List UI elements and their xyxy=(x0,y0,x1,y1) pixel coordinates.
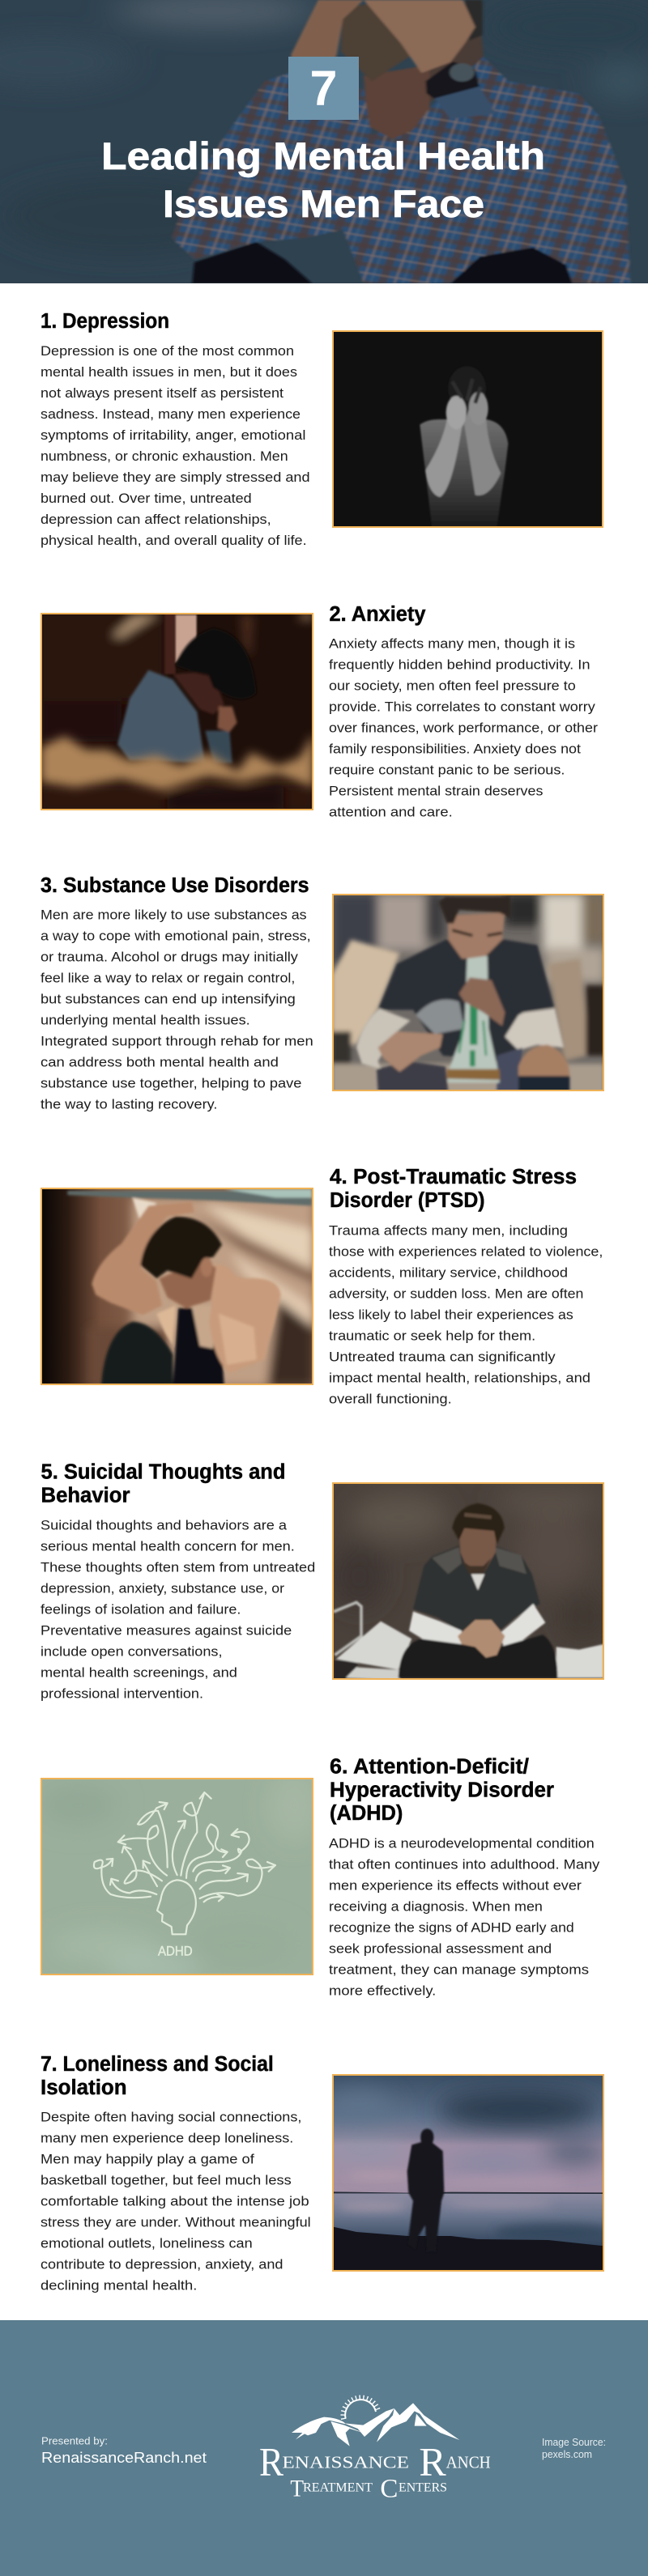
heading: adhd xyxy=(330,1755,554,1825)
text block: depression: burned out. Over time, untreated xyxy=(40,491,252,506)
heading: ptsd xyxy=(330,1166,577,1212)
text block: loneliness: stress they are under. Without meaningful xyxy=(40,2215,311,2230)
heading: suicidal thoughts xyxy=(40,1460,285,1507)
text block: depression: mental health issues in men, but it does xyxy=(40,364,297,380)
logo wordmark xyxy=(259,2439,491,2503)
text block: adhd: that often continues into adulthood. Many xyxy=(329,1857,600,1872)
photo: man in blue shirt behind blurred foreground xyxy=(40,613,313,810)
heading: loneliness: 7. Loneliness and Social xyxy=(40,2053,274,2076)
text block: loneliness: Despite often having social connections, xyxy=(40,2110,301,2124)
panel: anxiety xyxy=(40,603,598,819)
hero banner xyxy=(0,0,648,283)
text block: depression: numbness, or chronic exhaustion. Men xyxy=(40,448,288,464)
text block: adhd: ADHD is a neurodevelopmental condition xyxy=(329,1836,595,1851)
presented by: Presented by: xyxy=(41,2435,108,2446)
text block: anxiety: our society, men often feel pressure to xyxy=(329,678,576,693)
heading: loneliness xyxy=(40,2053,274,2099)
text block: adhd: treatment, they can manage symptoms xyxy=(329,1962,589,1977)
text block: suicidal thoughts: These thoughts often stem from untreated xyxy=(40,1559,315,1575)
photo: chalk drawing of a head with arrows: ADHD xyxy=(158,1944,193,1959)
text block: anxiety: over finances, work performance, or other xyxy=(329,721,598,735)
logo wordmark: R xyxy=(259,2439,284,2485)
text block: loneliness: contribute to depression, anxiety, and xyxy=(40,2257,284,2272)
text block: depression: Depression is one of the most common xyxy=(40,343,294,359)
heading: loneliness: Isolation xyxy=(40,2077,127,2099)
text block: adhd xyxy=(329,1836,600,1998)
image source: Image Source: xyxy=(542,2437,606,2448)
text block: ptsd: impact mental health, relationships, and xyxy=(329,1370,590,1386)
text block: loneliness: many men experience deep loneliness. xyxy=(40,2131,293,2145)
text block: anxiety: Persistent mental strain deserves xyxy=(329,784,543,798)
text block: ptsd: accidents, military service, childhood xyxy=(329,1265,568,1281)
text block: substance use disorders xyxy=(40,907,313,1112)
text block: substance use disorders: Men are more likely to use substances as xyxy=(40,907,307,923)
text block: depression: depression can affect relationships, xyxy=(40,512,271,527)
hero photo: man holding his head xyxy=(0,0,648,283)
heading: suicidal thoughts: Behavior xyxy=(40,1485,130,1507)
text block: depression xyxy=(40,343,310,548)
photo: man sitting on a bed xyxy=(332,1482,604,1680)
photo: man curled with arms over head xyxy=(40,1188,313,1385)
title: Issues Men Face xyxy=(163,182,484,225)
text block: anxiety: provide. This correlates to constant worry xyxy=(329,699,595,714)
text block: adhd: recognize the signs of ADHD early and xyxy=(329,1920,574,1935)
text block: depression: sadness. Instead, many men experience xyxy=(40,406,301,422)
heading: adhd: 6. Attention-Deficit/ xyxy=(330,1755,529,1778)
text block: depression: not always present itself as persistent xyxy=(40,385,284,401)
logo wordmark: R xyxy=(419,2439,446,2485)
heading: substance use disorders: 3. Substance Use Disorders xyxy=(40,874,309,897)
text block: suicidal thoughts xyxy=(40,1517,315,1702)
text block: anxiety: require constant panic to be serious. xyxy=(329,763,565,777)
text block: ptsd xyxy=(329,1222,603,1407)
title: Leading Mental Health xyxy=(101,134,545,177)
text block: loneliness: emotional outlets, loneliness can xyxy=(40,2236,253,2251)
photo: man covering his face xyxy=(332,330,603,528)
text block: substance use disorders: but substances can end up intensifying xyxy=(40,991,296,1007)
text block: anxiety: family responsibilities. Anxiety does not xyxy=(329,742,581,756)
logo: Renaissance Ranch Treatment Centers xyxy=(259,2395,491,2503)
text block: ptsd: adversity, or sudden loss. Men are often xyxy=(329,1286,583,1302)
image source: pexels.com xyxy=(542,2449,592,2460)
heading: ptsd: 4. Post-Traumatic Stress xyxy=(330,1166,577,1188)
text block: substance use disorders: a way to cope with emotional pain, stress, xyxy=(40,928,311,944)
panel: loneliness xyxy=(40,2053,613,2293)
text block: suicidal thoughts: serious mental health concern for men. xyxy=(40,1538,295,1554)
presented by: RenaissanceRanch.net xyxy=(41,2449,207,2466)
text block: loneliness: declining mental health. xyxy=(40,2278,197,2293)
text block: substance use disorders: substance use together, helping to pave xyxy=(40,1075,301,1091)
text block: ptsd: Untreated trauma can significantly xyxy=(329,1349,556,1365)
text block: adhd: receiving a diagnosis. When men xyxy=(329,1899,543,1914)
text block: ptsd: less likely to label their experiences as xyxy=(329,1307,573,1323)
title xyxy=(101,134,545,225)
text block: anxiety: frequently hidden behind productivity. In xyxy=(329,657,590,672)
heading: adhd: Hyperactivity Disorder xyxy=(330,1779,554,1802)
text block: adhd: men experience its effects without ever xyxy=(329,1878,582,1893)
heading: ptsd: Disorder (PTSD) xyxy=(330,1189,484,1212)
text block: substance use disorders: underlying mental health issues. xyxy=(40,1012,250,1028)
logo wordmark: C xyxy=(380,2474,398,2503)
text block: ptsd: traumatic or seek help for them. xyxy=(329,1328,535,1344)
text block: suicidal thoughts: professional intervention. xyxy=(40,1685,203,1702)
text block: loneliness: comfortable talking about the intense job xyxy=(40,2194,309,2208)
text block: adhd: seek professional assessment and xyxy=(329,1941,552,1956)
text block: ptsd: those with experiences related to violence, xyxy=(329,1243,603,1260)
text block: adhd: more effectively. xyxy=(329,1983,436,1998)
text block: loneliness xyxy=(40,2110,311,2293)
logo wordmark: T xyxy=(290,2475,304,2502)
text block: loneliness: Men may happily play a game of xyxy=(40,2152,254,2166)
text block: depression: may believe they are simply stressed and xyxy=(40,470,310,485)
text block: anxiety: attention and care. xyxy=(329,805,453,819)
panel: depression xyxy=(40,310,603,548)
logo wordmark: ENTERS xyxy=(399,2481,447,2495)
text block: substance use disorders: the way to lasting recovery. xyxy=(40,1096,217,1112)
text block: substance use disorders: feel like a way to relax or regain control, xyxy=(40,970,295,986)
text block: substance use disorders: can address both mental health and xyxy=(40,1054,279,1070)
text block: ptsd: overall functioning. xyxy=(329,1391,452,1407)
photo: man on a couch with smoke xyxy=(332,894,604,1091)
text block: loneliness: basketball together, but feel much less xyxy=(40,2173,292,2187)
presented by xyxy=(41,2435,207,2466)
text block: depression: symptoms of irritability, anger, emotional xyxy=(40,427,306,443)
number badge: 7 xyxy=(310,61,337,116)
photo: chalk drawing of a head with arrows xyxy=(40,1778,313,1975)
text block: suicidal thoughts: Preventative measures against suicide xyxy=(40,1622,292,1639)
panel: substance use disorders xyxy=(40,874,606,1112)
icon: sun over mountains xyxy=(292,2398,459,2446)
text block: suicidal thoughts: feelings of isolation and failure. xyxy=(40,1601,241,1617)
number badge xyxy=(288,57,359,120)
heading: suicidal thoughts: 5. Suicidal Thoughts and xyxy=(40,1460,285,1483)
text block: substance use disorders: Integrated support through rehab for men xyxy=(40,1033,313,1049)
footer xyxy=(0,2320,648,2576)
image source xyxy=(542,2437,606,2460)
text block: ptsd: Trauma affects many men, including xyxy=(329,1222,568,1239)
panel: adhd xyxy=(38,1755,600,1998)
text block: anxiety: Anxiety affects many men, though it is xyxy=(329,636,575,651)
heading: adhd: (ADHD) xyxy=(330,1802,403,1825)
panel: ptsd xyxy=(40,1166,603,1407)
photo: silhouette of a man by a lake at dusk xyxy=(332,2074,604,2272)
text block: suicidal thoughts: include open conversations, xyxy=(40,1643,222,1660)
heading: depression: 1. Depression xyxy=(40,310,169,333)
logo wordmark: REATMENT xyxy=(303,2481,373,2495)
text block: depression: physical health, and overall quality of life. xyxy=(40,533,307,548)
text block: suicidal thoughts: mental health screenings, and xyxy=(40,1664,237,1681)
text block: suicidal thoughts: depression, anxiety, substance use, or xyxy=(40,1580,284,1596)
logo wordmark: ENAISSANCE xyxy=(282,2454,409,2472)
text block: suicidal thoughts: Suicidal thoughts and behaviors are a xyxy=(40,1517,288,1533)
panel: suicidal thoughts xyxy=(40,1460,608,1702)
text block: anxiety xyxy=(329,636,598,819)
text block: substance use disorders: or trauma. Alcohol or drugs may initially xyxy=(40,949,298,965)
heading: anxiety: 2. Anxiety xyxy=(329,603,426,626)
